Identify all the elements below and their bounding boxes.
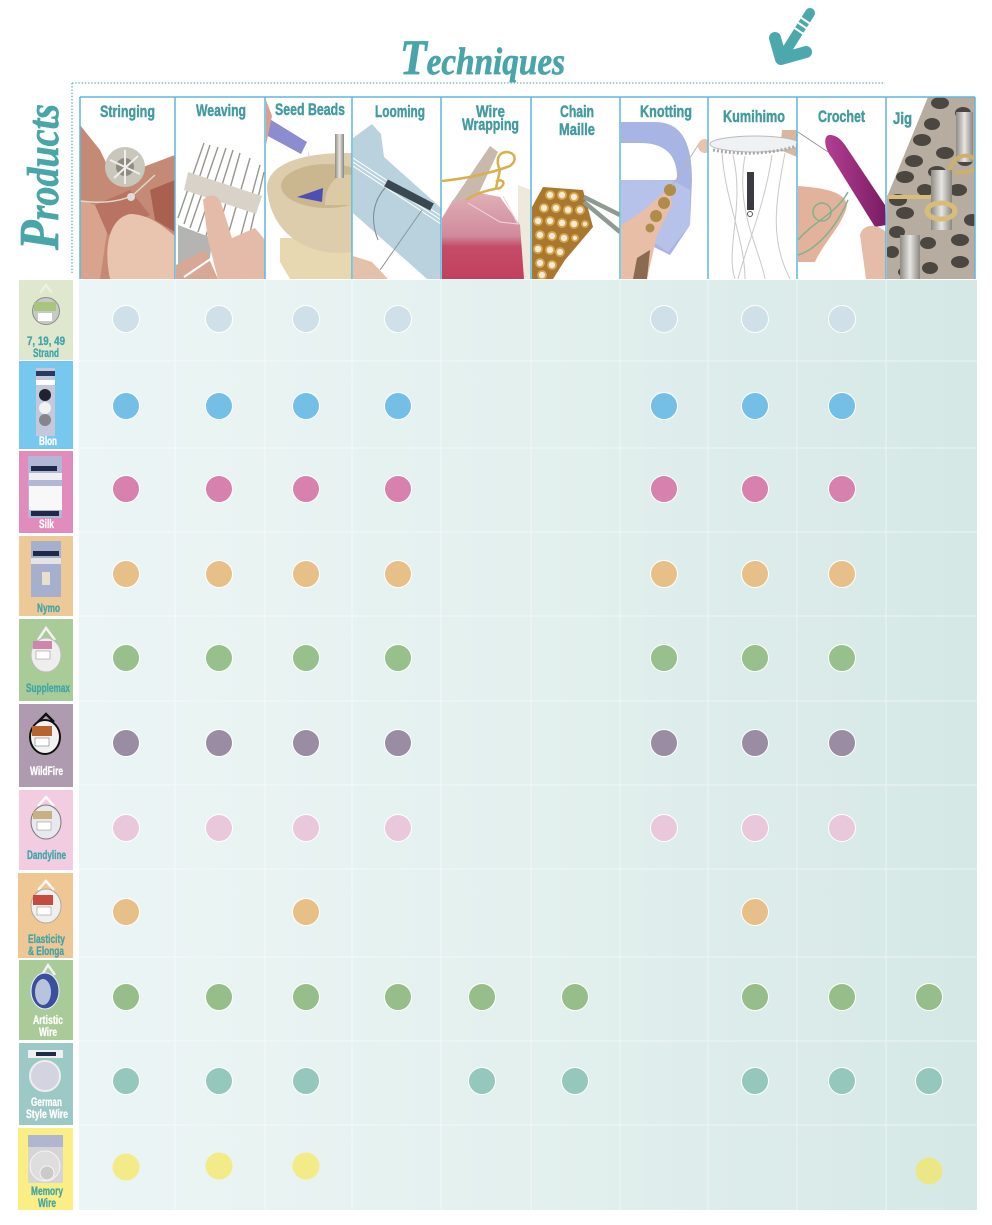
product: Artistic Wire: [19, 960, 73, 1040]
dots: 7, 19, 49 Strand row: [112, 306, 856, 332]
product: Blon: Blon: [39, 436, 57, 448]
title: Techniques: Techniques: [400, 29, 565, 85]
technique header: Kumihimo: [710, 110, 796, 279]
product: German Style Wire: Style Wire: [26, 1109, 68, 1121]
title: Products: Products: [9, 104, 71, 251]
product: Memory Wire: [18, 1128, 73, 1210]
matrix background: [79, 280, 977, 1210]
label: Wire Wrapping: Wire: [476, 102, 505, 121]
label: Kumihimo: Kumihimo: [723, 107, 785, 126]
technique header: Seed Beads: [266, 100, 352, 279]
header cell borders: [80, 97, 975, 279]
label: Wire Wrapping: Wrapping: [462, 115, 519, 134]
label: Crochet: Crochet: [818, 107, 865, 126]
label: Knotting: Knotting: [640, 102, 692, 121]
icon: arrow pointing down-left: [775, 13, 812, 59]
dots: WildFire row: [112, 730, 856, 756]
technique header: Chain Maille: [532, 97, 620, 279]
product: German Style Wire: German: [31, 1097, 62, 1109]
label: Stringing: Stringing: [100, 102, 155, 121]
product: Supplemax: Supplemax: [26, 683, 70, 695]
dots: German Style Wire row: [112, 1068, 942, 1094]
dots: Blon row: [112, 392, 856, 420]
dots: Memory Wire row: [112, 1152, 942, 1184]
label: Jig: Jig: [893, 109, 912, 128]
label: Weaving: Weaving: [196, 101, 246, 120]
label: Wire Wrapping: [462, 102, 519, 134]
technique header: Weaving: [176, 97, 265, 279]
label: Chain Maille: Chain: [560, 102, 594, 121]
dots: Dandyline row: [112, 814, 856, 842]
dots: Supplemax row: [112, 644, 856, 672]
product: WildFire: WildFire: [30, 766, 63, 778]
label: Chain Maille: Maille: [559, 120, 595, 139]
label: Chain Maille: [559, 102, 595, 139]
technique header: Jig: [885, 97, 980, 279]
product: Nymo: Nymo: [37, 603, 60, 615]
product: WildFire: [19, 704, 73, 787]
product: Elasticity & Elonga: [18, 873, 73, 958]
product: German Style Wire: [19, 1043, 73, 1125]
product: Blon: [19, 361, 73, 449]
product: Silk: [19, 451, 73, 533]
dots: Artistic Wire row: [112, 984, 942, 1010]
product: Memory Wire: Wire: [38, 1198, 56, 1210]
product: Artistic Wire: Artistic: [33, 1015, 63, 1027]
technique header: Wire Wrapping: [442, 97, 531, 279]
technique header: Stringing: [80, 97, 175, 279]
technique header: Knotting: [621, 97, 712, 279]
product: Nymo: [19, 536, 73, 616]
product: Silk: Silk: [39, 519, 54, 531]
product: 7, 19, 49 Strand: Strand: [33, 348, 59, 360]
product: Dandyline: [19, 790, 73, 870]
product: 7, 19, 49 Strand: 7, 19, 49: [27, 336, 65, 348]
technique header: Crochet: [798, 97, 886, 279]
product: Supplemax: [19, 619, 73, 701]
label: Seed Beads: Seed Beads: [275, 100, 345, 119]
product: Artistic Wire: Wire: [39, 1027, 57, 1039]
product: Elasticity & Elonga: Elasticity: [28, 934, 65, 946]
dots: Elasticity & Elonga row: [112, 898, 768, 926]
product: 7, 19, 49 Strand: [19, 280, 73, 360]
label: Looming: Looming: [375, 102, 425, 121]
dots: Silk row: [112, 476, 856, 502]
product: Memory Wire: Memory: [31, 1186, 63, 1198]
product: Dandyline: Dandyline: [27, 850, 66, 862]
dots: Nymo row: [112, 560, 856, 588]
technique header: Looming: [353, 97, 441, 279]
product: Elasticity & Elonga: & Elonga: [28, 946, 64, 958]
